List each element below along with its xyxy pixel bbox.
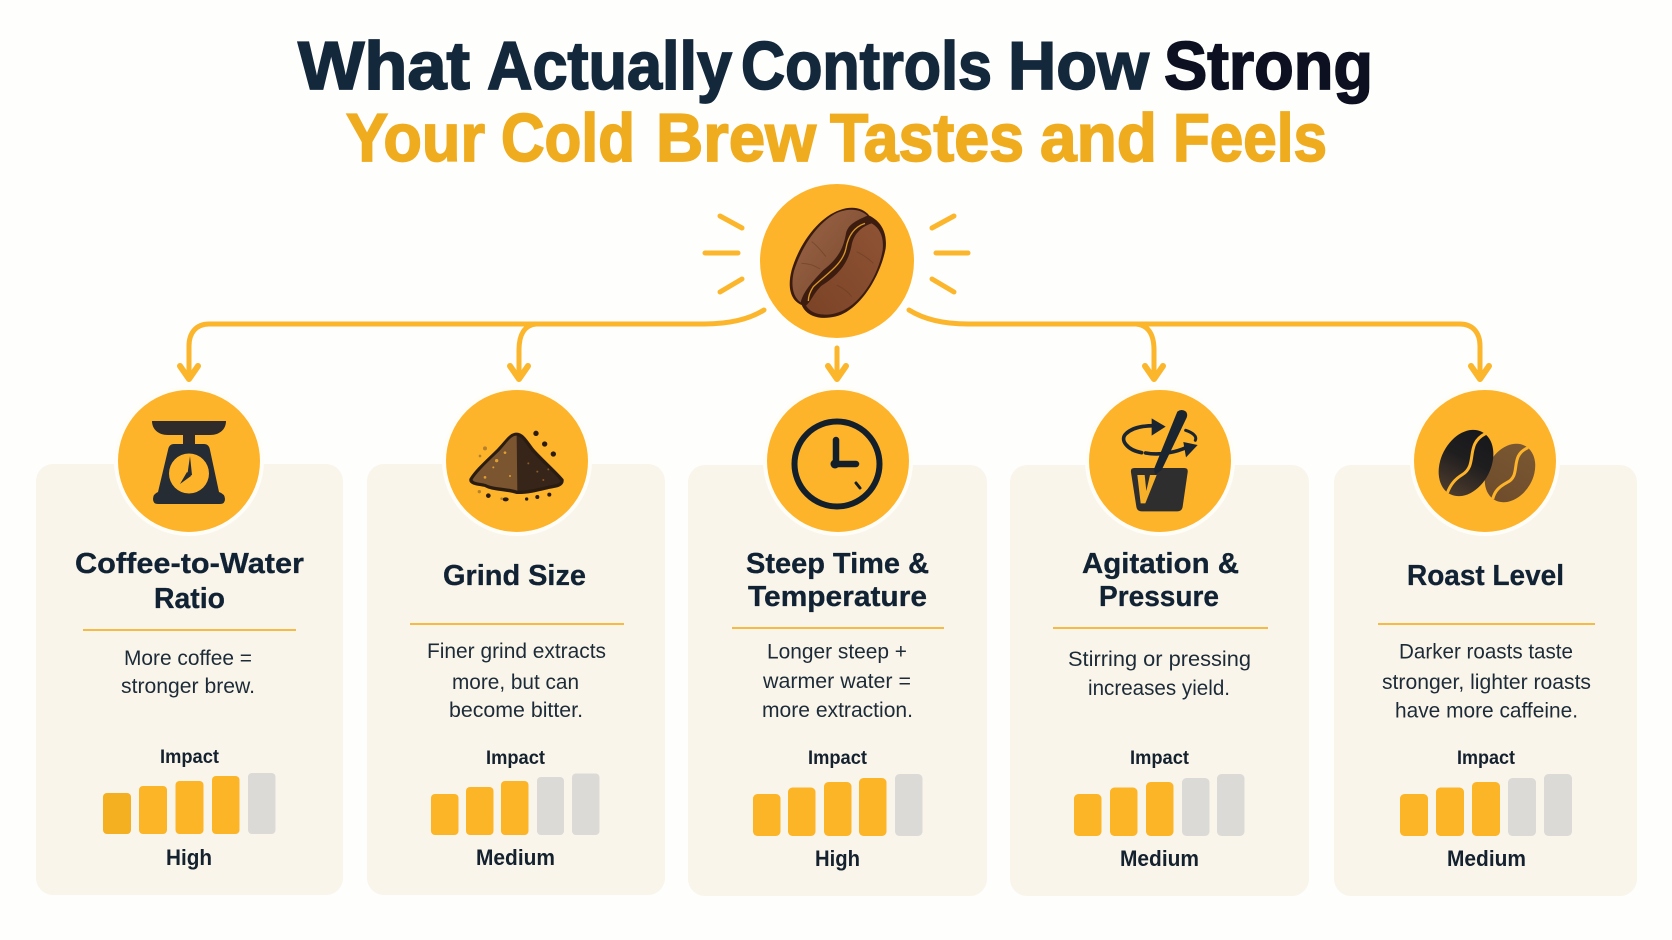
description bbox=[762, 640, 913, 722]
impact label: Impact bbox=[486, 748, 546, 769]
description: Longer steep + bbox=[767, 640, 907, 664]
description: stronger, lighter roasts bbox=[1382, 671, 1591, 694]
description bbox=[1068, 648, 1251, 700]
heading: Ratio bbox=[154, 583, 225, 615]
title line 1: How bbox=[1008, 28, 1150, 104]
heading bbox=[746, 548, 929, 613]
heading: Steep Time & bbox=[746, 548, 929, 580]
title line 2: Brew bbox=[656, 100, 817, 176]
impact bars: 3 of 5 bbox=[1400, 774, 1572, 836]
impact label: Impact bbox=[1130, 748, 1190, 769]
impact level: Medium bbox=[1120, 846, 1199, 871]
heading bbox=[1082, 548, 1239, 613]
heading: Temperature bbox=[748, 581, 927, 613]
description: have more caffeine. bbox=[1395, 700, 1578, 722]
description bbox=[1382, 640, 1591, 722]
title line 1: What bbox=[298, 28, 470, 104]
icon circle: scale bbox=[116, 388, 262, 534]
impact bars: 3 of 5 bbox=[431, 774, 600, 835]
title line 1: Strong bbox=[1164, 28, 1373, 104]
heading: Coffee-to-Water bbox=[75, 548, 304, 580]
impact bars: 4 of 5 bbox=[103, 773, 276, 834]
description: Stirring or pressing bbox=[1068, 648, 1251, 671]
icon circle: coffee grounds bbox=[444, 388, 590, 534]
heading: Agitation & bbox=[1082, 548, 1239, 580]
impact level: Medium bbox=[476, 845, 555, 870]
description: Finer grind extracts bbox=[427, 640, 606, 663]
impact label: Impact bbox=[808, 748, 868, 769]
panel: coffee-to-water ratio bbox=[36, 388, 343, 895]
heading bbox=[75, 548, 304, 615]
description: warmer water = bbox=[762, 670, 911, 693]
icon circle: clock bbox=[765, 388, 911, 534]
title line 2: Your bbox=[346, 100, 485, 176]
heading: Grind Size bbox=[443, 560, 586, 592]
title line 2: and bbox=[1040, 100, 1157, 176]
description: increases yield. bbox=[1088, 677, 1230, 700]
impact bars: 3 of 5 bbox=[1074, 774, 1244, 836]
card background bbox=[1334, 465, 1637, 896]
impact label: Impact bbox=[1457, 748, 1516, 769]
sun rays bbox=[705, 216, 968, 292]
description: More coffee = bbox=[124, 647, 252, 670]
description: become bitter. bbox=[449, 699, 583, 722]
title line 1 bbox=[298, 28, 1373, 104]
center circle with coffee bean bbox=[760, 184, 914, 338]
card background bbox=[36, 464, 343, 895]
description: more, but can bbox=[452, 671, 579, 694]
icon circle: stirring cup bbox=[1087, 388, 1233, 534]
description bbox=[427, 640, 606, 722]
impact level: Medium bbox=[1447, 846, 1526, 871]
title bbox=[298, 28, 1373, 176]
impact level: High bbox=[166, 845, 212, 870]
impact label: Impact bbox=[160, 747, 220, 768]
icon: coffee bean bbox=[790, 208, 886, 318]
description: Darker roasts taste bbox=[1399, 640, 1573, 664]
heading: Roast Level bbox=[1407, 560, 1564, 592]
impact bars: 4 of 5 bbox=[753, 774, 922, 836]
panel: steep time and temperature bbox=[688, 388, 987, 896]
title line 1: Actually bbox=[487, 28, 732, 104]
title line 2: Tastes bbox=[830, 100, 1024, 176]
card background bbox=[688, 465, 987, 896]
icon circle: dark and light beans bbox=[1412, 388, 1558, 534]
panel: grind size bbox=[367, 388, 665, 895]
card background bbox=[1010, 465, 1309, 896]
description: more extraction. bbox=[762, 699, 913, 722]
card background bbox=[367, 464, 665, 895]
title line 1: Controls bbox=[741, 28, 992, 104]
title line 2 bbox=[346, 100, 1327, 176]
description: stronger brew. bbox=[121, 675, 255, 698]
connector arrows bbox=[180, 310, 1489, 379]
panel: roast level bbox=[1334, 388, 1637, 896]
description bbox=[121, 647, 255, 698]
title line 2: Feels bbox=[1173, 100, 1327, 176]
title line 2: Cold bbox=[501, 100, 635, 176]
panel: agitation and pressure bbox=[1010, 388, 1309, 896]
heading: Pressure bbox=[1099, 581, 1219, 613]
impact level: High bbox=[815, 846, 860, 871]
